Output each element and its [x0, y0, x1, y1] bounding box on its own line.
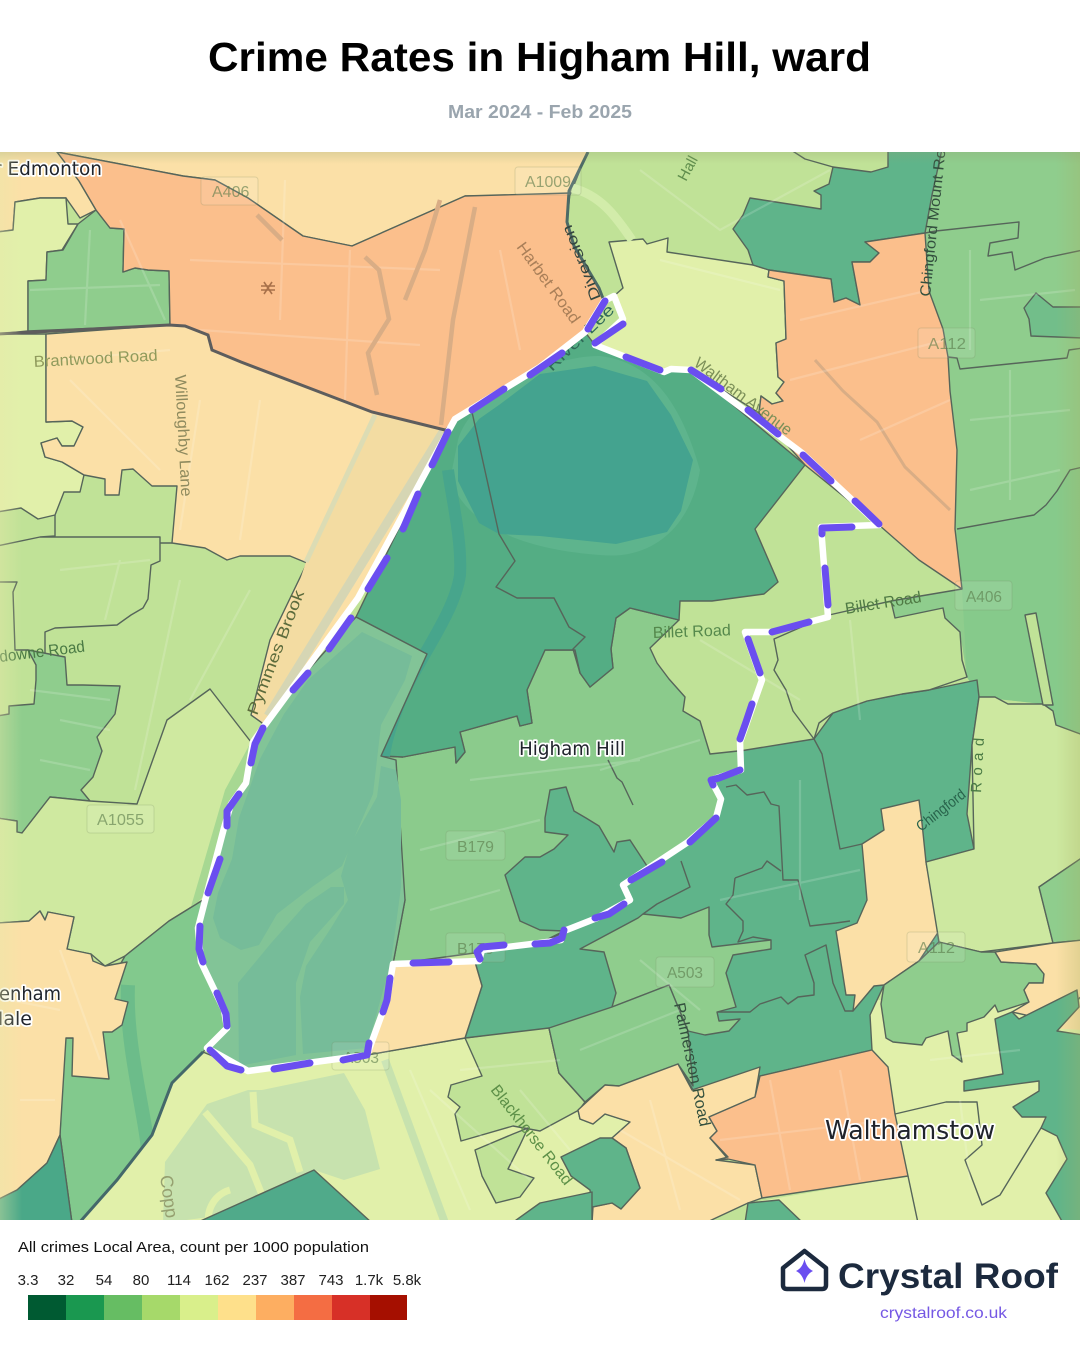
road names: Pymmes Brook [245, 587, 308, 717]
road names: Diversion [559, 222, 605, 303]
place label: Walthamstow: Walthamstow [825, 1116, 995, 1146]
lake: east basin [300, 766, 401, 1054]
ward boundary: white base line [198, 296, 879, 1071]
area: south east mid green [881, 942, 1044, 1062]
logo wordmark: Crystal Roof [838, 1257, 1058, 1296]
area: north west green block [28, 210, 170, 331]
area: lime east of Chingford Road [926, 697, 1080, 952]
road names: Waltham Avenue [691, 355, 795, 439]
road label: B179 lower: B179 [457, 941, 494, 958]
logo url: crystalroof.co.uk [880, 1305, 1008, 1322]
area: north west pale green [0, 198, 78, 334]
area: south east pale [748, 1000, 1080, 1223]
area: east dark green [964, 990, 1080, 1223]
legend values: 1.7k [355, 1272, 384, 1289]
road names: Brantwood Road [33, 348, 158, 371]
dark block outlines [643, 739, 862, 1012]
area: Edmonton orange [57, 152, 604, 430]
road label: B179 upper: B179 [457, 839, 494, 856]
area: ward inner dark green block [505, 787, 647, 931]
road names: Road [968, 737, 988, 793]
road label: A503 west [332, 1042, 389, 1070]
river channel [384, 470, 460, 756]
area: Higham Hill inner lines [608, 760, 633, 805]
legend values: 237 [242, 1272, 268, 1289]
area: south west lime [0, 689, 251, 966]
Billet Road line to A406 [891, 589, 962, 601]
legend values: 162 [204, 1272, 230, 1289]
area: south light green blocks [448, 1028, 585, 1141]
boroughs boundary [0, 325, 445, 430]
park paths [205, 1092, 300, 1225]
road label: A1055: A1055 [97, 812, 144, 829]
area: far south west teal [0, 1135, 72, 1223]
road names: River Lee [543, 301, 618, 375]
area: Palmerston mid green [549, 985, 693, 1102]
road label: A406 west: A406 [212, 184, 249, 201]
road label: A112 north [918, 328, 975, 358]
road names: Billet Road [653, 622, 731, 642]
area: billet road block [774, 601, 967, 739]
lake: north basin [213, 632, 412, 950]
area: western reservoir surround [198, 617, 427, 1071]
area: Chingford cream [836, 800, 939, 1011]
orange area channels [257, 200, 475, 425]
park greens [163, 1073, 380, 1223]
area: west green block [0, 650, 120, 833]
area: small dark greens south [561, 1138, 640, 1209]
road label: A1009: A1009 [525, 174, 571, 191]
area: teal reservoir [458, 366, 693, 544]
road label: A406 east [955, 581, 1012, 610]
legend values [18, 1272, 422, 1289]
road names: Harbet Road [513, 239, 583, 327]
line through reservoir [472, 412, 585, 673]
stream in north east orange [815, 360, 950, 510]
area: Walthamstow cream [578, 1064, 762, 1223]
area: south west green [60, 900, 227, 1223]
road names: Billet Road [844, 589, 923, 618]
icon: house with sparkle [783, 1251, 826, 1289]
road label: B179 upper [446, 831, 505, 860]
icon: rail station [261, 282, 275, 294]
area: A503 mid green [580, 907, 771, 1035]
area: mid green Higham Hill ward [381, 608, 741, 964]
road label: A112 north: A112 [928, 336, 966, 353]
road names: Copp [156, 1174, 182, 1219]
pale road north of river [572, 188, 632, 240]
legend colour scale [28, 1295, 407, 1320]
area: ward dark green around reservoir [356, 332, 805, 763]
legend values: 5.8k [393, 1272, 422, 1289]
road label: A112 south: A112 [918, 940, 955, 957]
area: west pale green [0, 334, 84, 519]
road label: A503 west: A503 [343, 1050, 379, 1067]
river boundary south west [79, 1052, 203, 1223]
area: north east dark green [733, 140, 944, 305]
road names: Chingford [913, 786, 969, 835]
legend values: 387 [280, 1272, 306, 1289]
area: Brantwood cream [41, 325, 445, 725]
area: reservoir rim [450, 356, 700, 556]
area: Walthamstow orange [709, 1050, 908, 1198]
area: western lime outlines [0, 515, 172, 660]
legend values: 54 [96, 1272, 112, 1289]
area: east green lines [925, 222, 1080, 529]
legend values: 114 [167, 1272, 191, 1289]
place label: Higham Hill: Higham Hill [519, 738, 625, 760]
lake: central basin [238, 887, 344, 1066]
road names: Willoughby Lane [171, 374, 194, 497]
place label: Tottenham Hale: enham [0, 983, 61, 1005]
area: large south east green [465, 680, 979, 1102]
road label: A503 east: A503 [667, 965, 703, 982]
legend title: All crimes Local Area, count per 1000 population [18, 1239, 369, 1256]
road label: A112 south [907, 932, 965, 962]
place label: Tottenham Hale [0, 983, 61, 1030]
area: north eastern pale [595, 238, 786, 413]
road label: A503 east [656, 957, 714, 987]
area: Tottenham Hale cream [0, 911, 128, 1200]
legend values: 32 [58, 1272, 74, 1289]
road names: Blackhorse Road [487, 1082, 575, 1189]
title: Crime Rates in Higham Hill, ward [208, 34, 871, 80]
area: east cream [995, 940, 1080, 1020]
road strip alongside ward [255, 415, 445, 725]
ward boundary: purple dashes [199, 301, 879, 1070]
area: cream block inside ward [367, 962, 482, 1055]
legend values: 3.3 [18, 1272, 38, 1289]
legend values: 743 [318, 1272, 344, 1289]
map edge vignette [0, 152, 1080, 1220]
road label: A1009 [515, 167, 581, 195]
road names [0, 148, 988, 1219]
road label: B179 lower [446, 933, 505, 962]
street lines [10, 170, 1075, 1210]
legend values: 80 [133, 1272, 149, 1289]
river boundary north [567, 152, 604, 301]
road label: A1055 [87, 805, 154, 833]
road label: A406 east: A406 [966, 589, 1002, 606]
road names: downe Road [0, 639, 86, 666]
road names: Hall [675, 153, 702, 184]
subtitle: date range: Mar 2024 - Feb 2025 [448, 101, 632, 122]
legend [18, 1239, 422, 1320]
area: north east orange [759, 233, 962, 589]
area: southern teal triangle [196, 1170, 372, 1223]
road names: Palmerston Road [670, 1001, 713, 1128]
area: right-hand mid green column [891, 140, 1080, 735]
area: southern pale park [79, 1028, 630, 1223]
road label: A406 west [201, 177, 258, 205]
logo: Crystal Roof [783, 1251, 1058, 1322]
area: northern cream zone [0, 152, 586, 246]
road names: Chingford Mount Ro [917, 148, 949, 297]
